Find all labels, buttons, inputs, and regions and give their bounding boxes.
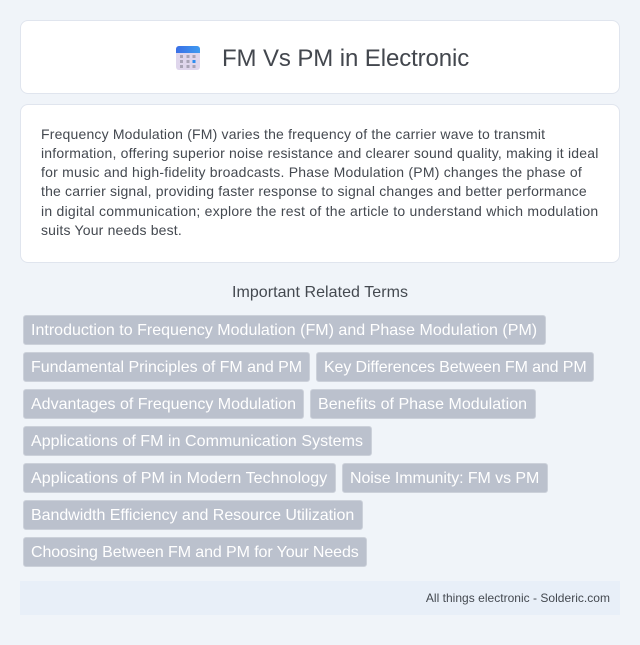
tag: Fundamental Principles of FM and PM [31, 359, 302, 376]
paragraph: information, offering superior noise resistance and clearer sound quality, making it ideal [41, 145, 599, 161]
tag [23, 426, 372, 456]
panel: summary text [20, 104, 620, 263]
tag [23, 463, 336, 493]
tag: Applications of FM in Communication Systems [31, 433, 363, 450]
tag: Bandwidth Efficiency and Resource Utilization [31, 507, 354, 524]
tag: Benefits of Phase Modulation [318, 396, 527, 413]
tag [23, 389, 304, 419]
tag: Noise Immunity: FM vs PM [350, 470, 539, 487]
tag: Choosing Between FM and PM for Your Needs [31, 544, 359, 561]
paragraph: for music and high-fidelity broadcasts. Phase Modulation (PM) changes the phase of [41, 164, 582, 180]
tag [23, 537, 367, 567]
tag: Applications of PM in Modern Technology [31, 470, 327, 487]
tag: Introduction to Frequency Modulation (FM) and Phase Modulation (PM) [31, 322, 537, 339]
icon: calendar [176, 46, 200, 70]
title: FM Vs PM in Electronic [222, 45, 469, 72]
paragraph: suits Your needs best. [41, 222, 182, 238]
footer text: All things electronic - Solderic.com [426, 591, 610, 605]
heading: related terms: Important Related Terms [232, 284, 408, 301]
tag [342, 463, 548, 493]
paragraph: in digital communication; explore the rest of the article to understand which modulation [41, 203, 598, 219]
tag [310, 389, 536, 419]
paragraph: Frequency Modulation (FM) varies the frequency of the carrier wave to transmit [41, 126, 545, 142]
footer [20, 581, 620, 615]
tag [316, 352, 594, 382]
header panel [20, 20, 620, 94]
paragraph [41, 126, 599, 238]
paragraph: the carrier signal, providing faster response to signal changes and better performance [41, 183, 587, 199]
tag: Advantages of Frequency Modulation [31, 396, 296, 413]
tag: Key Differences Between FM and PM [324, 359, 587, 376]
tag [23, 352, 310, 382]
tag list [23, 315, 594, 567]
tag [23, 315, 546, 345]
tag [23, 500, 363, 530]
